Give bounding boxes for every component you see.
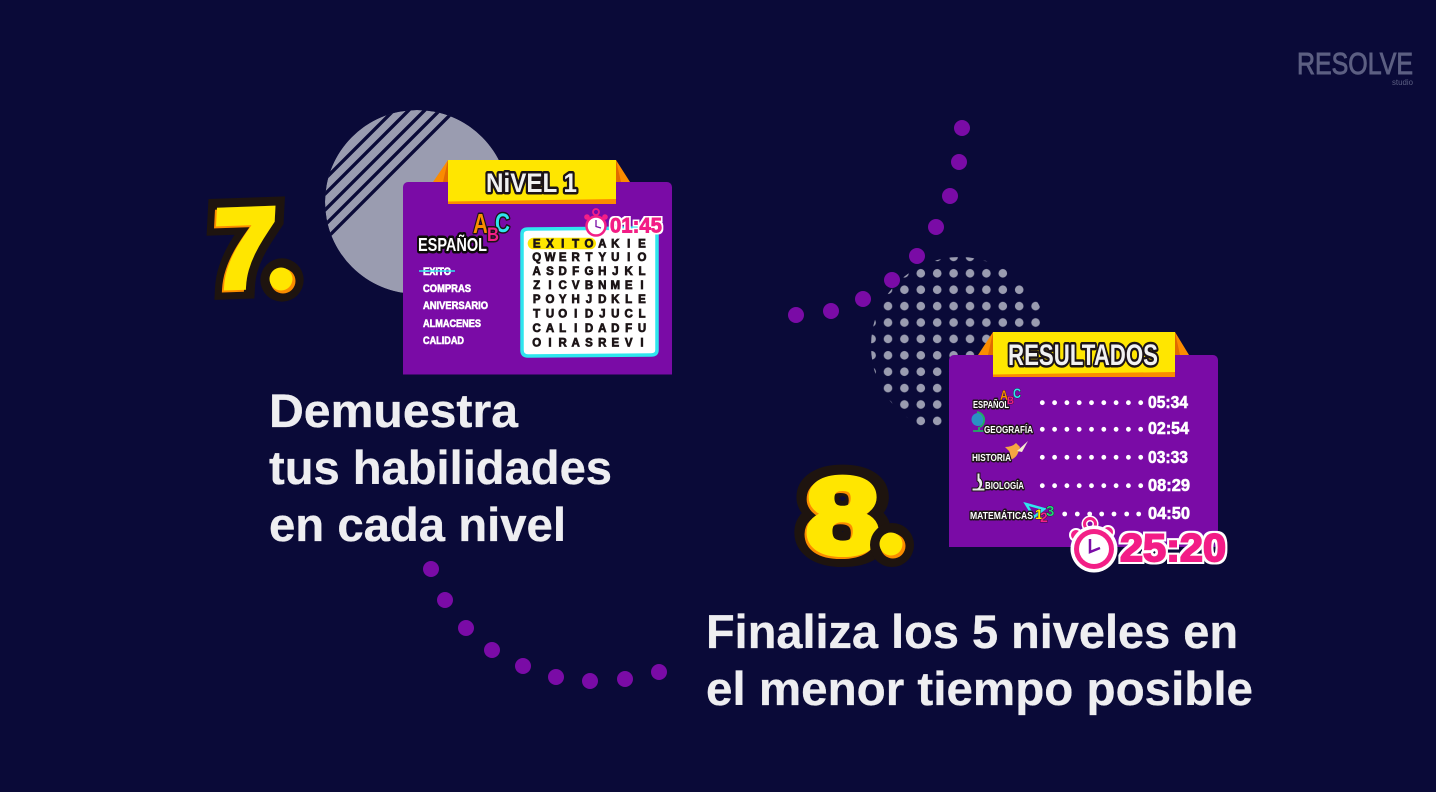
word search board: E xyxy=(559,252,567,264)
step number 8 xyxy=(804,455,914,578)
panel: resultados card xyxy=(949,332,1226,572)
card background xyxy=(403,182,672,374)
row: matemáticas xyxy=(970,503,1190,525)
row: biología: 08:29 xyxy=(1148,475,1190,495)
row: geografía: GEOGRAFÍA xyxy=(984,423,1033,436)
word search board: I xyxy=(640,337,644,349)
word search board: U xyxy=(611,252,619,264)
word search board: R xyxy=(559,337,568,349)
row: geografía xyxy=(972,412,1189,438)
word search board: Z xyxy=(533,280,540,292)
row: español xyxy=(973,385,1188,412)
row: español: ESPAÑOL xyxy=(973,398,1009,411)
row: español: 05:34 xyxy=(1148,392,1188,412)
step number 8: 8 xyxy=(806,455,879,576)
word search board: I xyxy=(548,280,552,292)
word list: EXITO xyxy=(423,266,451,278)
row: biología xyxy=(972,473,1190,495)
word search board: I xyxy=(627,238,630,250)
word search board: I xyxy=(640,280,644,292)
word search board: J xyxy=(612,266,619,278)
word search board: O xyxy=(585,238,594,250)
step number 8: 8 xyxy=(806,455,879,576)
word list: ALMACENES xyxy=(423,318,481,330)
word search board: U xyxy=(638,323,646,335)
word search board: I xyxy=(627,252,630,264)
total timer 25:20 xyxy=(1070,518,1226,572)
word list: CALIDAD xyxy=(423,335,464,347)
row: matemáticas: MATEMÁTICAS xyxy=(970,509,1033,522)
word search board: I xyxy=(561,238,564,250)
banner underside xyxy=(448,199,616,204)
timer 01:45: 01:45 xyxy=(610,214,662,238)
fold shading xyxy=(988,332,1180,355)
heading: step 8 xyxy=(706,606,1253,716)
word search board: E xyxy=(533,238,541,250)
step number 7: 7 xyxy=(208,186,277,314)
striped circle decoration xyxy=(325,110,499,293)
word search board: H xyxy=(572,294,580,306)
subject label with ABC icon: ESPAÑOL xyxy=(418,234,487,255)
word search board: N xyxy=(598,280,606,292)
word list: ANIVERSARIO xyxy=(423,300,488,312)
word search board: U xyxy=(546,309,554,321)
word search board: K xyxy=(611,294,620,306)
word list xyxy=(419,266,488,347)
word search board: O xyxy=(532,337,541,349)
word search board: W xyxy=(545,252,556,264)
step number 7: 7 xyxy=(210,184,279,312)
word list: COMPRAS xyxy=(423,283,471,295)
word search board: V xyxy=(572,280,580,292)
banner title: NiVEL 1 xyxy=(486,168,577,198)
word search board: C xyxy=(625,309,633,321)
fold shading xyxy=(443,160,621,182)
word search board: A xyxy=(533,266,541,278)
row: matemáticas: 04:50 xyxy=(1148,503,1190,523)
row: historia: 03:33 xyxy=(1148,447,1188,467)
word search board: A xyxy=(572,337,580,349)
word search board: X xyxy=(546,238,554,250)
row: matemáticas: 2 xyxy=(1040,509,1048,525)
word search board: L xyxy=(559,323,566,335)
word search board: B xyxy=(585,280,593,292)
word search board: A xyxy=(598,323,606,335)
logo: Resolve studio: studio xyxy=(1392,78,1414,87)
word search board: E xyxy=(611,337,619,349)
word search board: O xyxy=(638,252,647,264)
subject label with ABC icon: C xyxy=(495,208,510,238)
word search board: R xyxy=(572,252,581,264)
word search board: L xyxy=(638,266,646,278)
word search board: T xyxy=(533,309,540,321)
row: geografía: 02:54 xyxy=(1148,418,1189,438)
word search board: K xyxy=(611,238,620,250)
banner folds xyxy=(978,332,1189,355)
word search board: S xyxy=(546,266,554,278)
word search board: I xyxy=(548,337,552,349)
heading: step 8: Finaliza los 5 niveles en xyxy=(706,606,1238,659)
word search board: C xyxy=(533,323,541,335)
banner xyxy=(993,332,1175,377)
subject label with ABC icon xyxy=(418,208,510,255)
word search board xyxy=(522,228,657,356)
dotted path: lower middle xyxy=(423,561,667,689)
word search board: Q xyxy=(532,252,541,264)
word search board: Y xyxy=(598,252,606,264)
timer 01:45 xyxy=(584,209,662,238)
word search board: E xyxy=(638,294,646,306)
word search board: D xyxy=(598,294,606,306)
total timer 25:20: 25:20 xyxy=(1120,527,1226,570)
word search board: A xyxy=(598,238,606,250)
banner xyxy=(448,160,616,204)
step number 8: 8 xyxy=(804,457,877,578)
word search board: U xyxy=(611,309,619,321)
word search board: P xyxy=(533,294,541,306)
word search board: L xyxy=(625,294,632,306)
word search board: H xyxy=(598,266,606,278)
word search board: E xyxy=(638,238,646,250)
heading: step 7 xyxy=(269,385,612,552)
word search board: E xyxy=(625,280,633,292)
banner folds xyxy=(433,160,630,182)
banner title: RESULTADOS xyxy=(1008,339,1158,372)
row: español: C xyxy=(1013,385,1021,401)
heading: step 7: tus habilidades xyxy=(269,442,612,495)
row: español: A xyxy=(1000,387,1008,403)
row: historia xyxy=(972,441,1188,467)
word search board: O xyxy=(558,309,567,321)
word search board: D xyxy=(559,266,567,278)
word search board: D xyxy=(585,323,593,335)
word search board: T xyxy=(585,252,593,264)
subject label with ABC icon: B xyxy=(487,225,499,246)
word search board: T xyxy=(572,238,579,250)
row: matemáticas: 3 xyxy=(1046,503,1054,520)
word search board: I xyxy=(574,323,577,335)
word search board: G xyxy=(585,266,594,278)
row: historia: HISTORIA xyxy=(972,452,1011,464)
word search board: L xyxy=(638,309,646,321)
heading: step 8: el menor tiempo posible xyxy=(706,663,1253,716)
row: matemáticas: 1 xyxy=(1035,506,1043,522)
row: biología: BIOLOGÍA xyxy=(985,479,1024,492)
panel: nivel 1 game card xyxy=(403,160,672,374)
word search board: V xyxy=(625,337,633,349)
word search board: Y xyxy=(559,294,567,306)
row: español: B xyxy=(1007,395,1014,407)
word search board: F xyxy=(625,323,632,335)
word search board: K xyxy=(625,266,634,278)
step number 7: 7 xyxy=(210,184,279,312)
heading: step 7: en cada nivel xyxy=(269,499,566,552)
word search board: S xyxy=(585,337,593,349)
dotted path: upper right xyxy=(788,120,970,323)
word search board: M xyxy=(611,280,620,292)
word search board: D xyxy=(611,323,619,335)
subject label with ABC icon: A xyxy=(473,208,488,239)
word search board: O xyxy=(546,294,555,306)
word search board: J xyxy=(586,294,592,306)
word search board: I xyxy=(574,309,577,321)
word search board: C xyxy=(559,280,567,292)
word search board: F xyxy=(572,266,579,278)
word search board: R xyxy=(598,337,607,349)
heading: step 7: Demuestra xyxy=(269,385,519,438)
word search board: A xyxy=(546,323,554,335)
dotted circle decoration xyxy=(871,257,1040,426)
card background xyxy=(949,355,1218,547)
banner underside xyxy=(993,372,1175,377)
word search board: D xyxy=(585,309,593,321)
word search board: J xyxy=(599,309,606,321)
